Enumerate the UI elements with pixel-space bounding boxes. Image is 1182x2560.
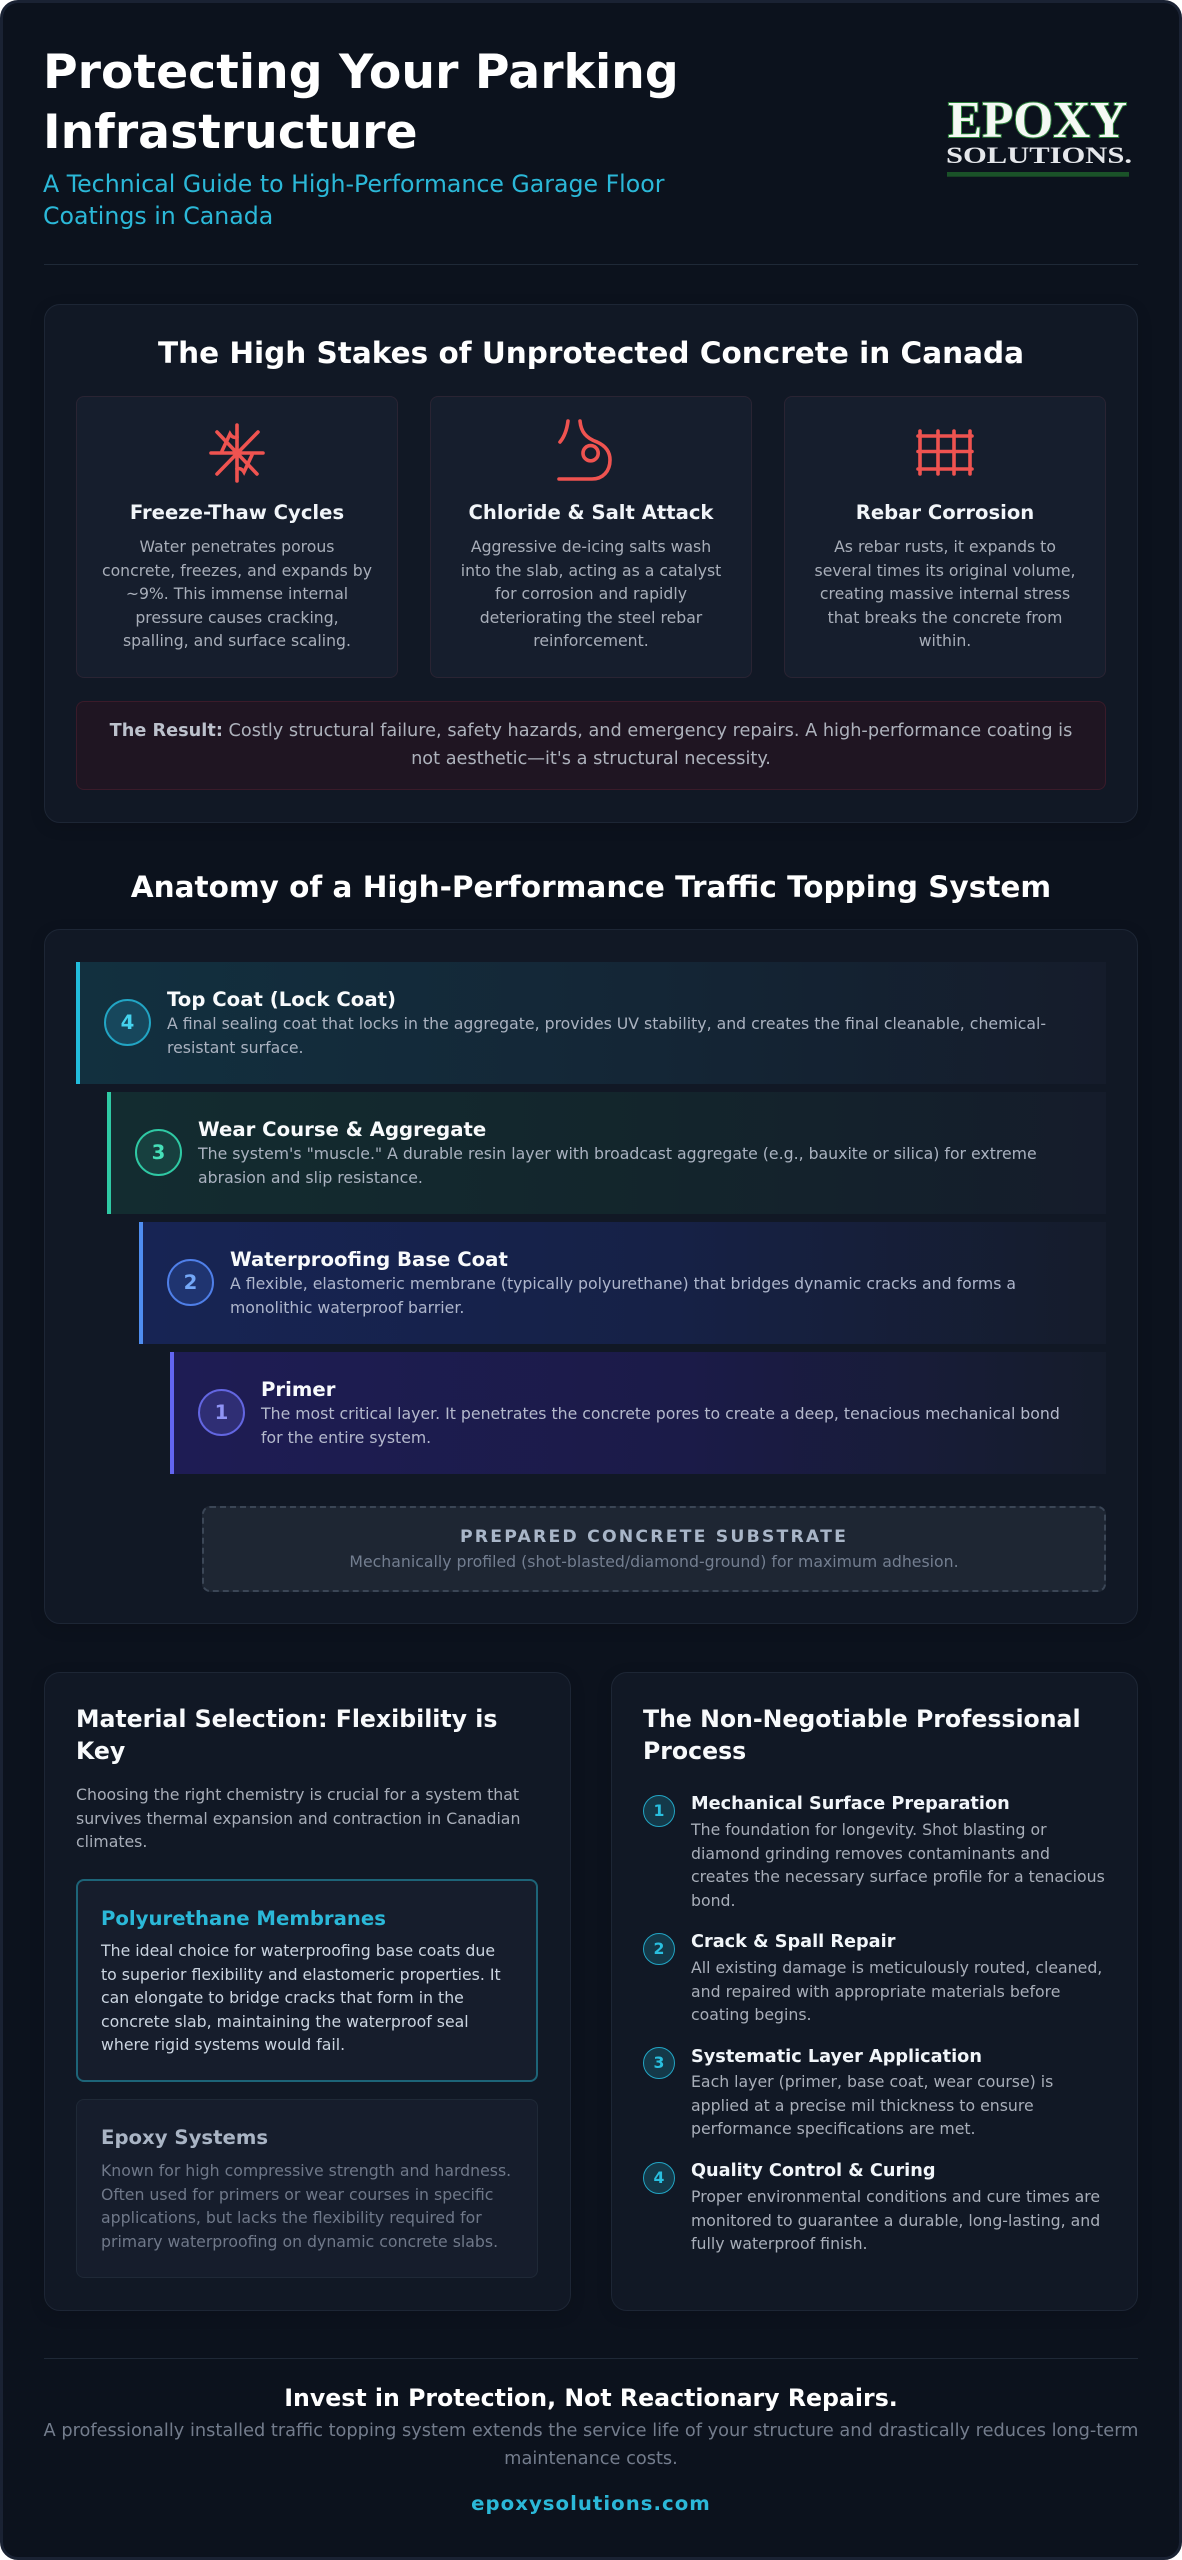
card: polyurethane membranes — [76, 1879, 538, 2082]
layer description — [198, 1144, 1037, 1187]
number badge 2: 2 — [184, 1271, 197, 1294]
step 1 text: bond. — [691, 1891, 736, 1910]
callout: the result — [76, 701, 1106, 790]
layer description — [167, 1014, 1046, 1057]
step 4 title: Quality Control & Curing — [691, 2161, 936, 2181]
footer text: maintenance costs. — [504, 2449, 678, 2469]
epoxy text: primary waterproofing on dynamic concrete slabs. — [101, 2232, 498, 2251]
layer description: The system's "muscle." A durable resin layer with broadcast aggregate (e.g., bauxite or silica) for extreme — [198, 1144, 1037, 1163]
layer 3: wear course — [107, 1092, 1106, 1214]
layer description: A final sealing coat that locks in the aggregate, provides UV stability, and creates the final cleanable, chemical- — [167, 1014, 1046, 1033]
panel: the high stakes — [44, 304, 1138, 823]
step 2 text: All existing damage is meticulously routed, cleaned, — [691, 1958, 1102, 1977]
step 3 number: 3 — [654, 2053, 664, 2072]
card body: Water penetrates porous — [140, 537, 334, 556]
epoxy text — [101, 2161, 511, 2251]
card body: concrete, freezes, and expands by — [102, 561, 372, 580]
step 3 title: Systematic Layer Application — [691, 2047, 982, 2067]
heading: professional process: The Non-Negotiable Professional — [643, 1705, 1081, 1733]
step 4 number — [643, 2162, 675, 2194]
heading: anatomy: Anatomy of a High-Performance Traffic Topping System — [131, 870, 1051, 904]
step 1 text — [690, 1820, 1105, 1910]
epoxy title: Epoxy Systems — [101, 2126, 268, 2149]
icon: rebar grid — [916, 429, 974, 476]
title — [43, 45, 679, 160]
layer 4: top coat — [76, 962, 1106, 1084]
icon: salt drop — [557, 419, 612, 481]
number badge 3 — [135, 1129, 182, 1176]
card: freeze-thaw cycles — [76, 396, 398, 678]
polyurethane text: to superior flexibility and elastomeric properties. It — [101, 1965, 501, 1984]
layer description: monolithic waterproof barrier. — [230, 1298, 464, 1317]
layer description — [230, 1274, 1016, 1317]
heading: professional process: Process — [643, 1737, 746, 1765]
layer description: The most critical layer. It penetrates the concrete pores to create a deep, tenacious mechanical bond — [261, 1404, 1060, 1423]
subtitle: A Technical Guide to High-Performance Garage Floor — [43, 170, 664, 198]
step 4 number: 4 — [654, 2168, 664, 2187]
polyurethane text: can elongate to bridge cracks that form in the — [101, 1988, 464, 2007]
polyurethane text — [100, 1941, 501, 2054]
substrate title: PREPARED CONCRETE SUBSTRATE — [460, 1527, 848, 1547]
step 3 text — [691, 2072, 1053, 2138]
epoxy text: Often used for primers or wear courses in specific — [101, 2185, 493, 2204]
layer 1: primer — [170, 1352, 1106, 1474]
heading: material selection — [76, 1705, 497, 1765]
step 2 number — [643, 1933, 675, 1965]
step 4 text — [691, 2187, 1100, 2253]
step 4 text: Proper environmental conditions and cure times are — [691, 2187, 1100, 2206]
card body — [102, 537, 372, 650]
step 1 text: The foundation for longevity. Shot blasting or — [691, 1820, 1047, 1839]
card body: Aggressive de-icing salts wash — [471, 537, 711, 556]
number badge 3: 3 — [152, 1141, 165, 1164]
icon: snowflake crack — [209, 423, 265, 483]
step 2 title: Crack & Spall Repair — [691, 1932, 895, 1952]
step 4 text: fully waterproof finish. — [691, 2234, 868, 2253]
layer description: abrasion and slip resistance. — [198, 1168, 423, 1187]
card body: for corrosion and rapidly — [495, 584, 687, 603]
step 2 text — [691, 1958, 1102, 2024]
step 3 — [643, 2047, 1053, 2138]
title: Infrastructure — [43, 105, 418, 160]
step 4 — [643, 2161, 1100, 2253]
footer heading: Invest in Protection, Not Reactionary Repairs. — [284, 2384, 898, 2412]
layer title: Primer — [261, 1378, 335, 1401]
substrate note: Mechanically profiled (shot-blasted/diamond-ground) for maximum adhesion. — [349, 1552, 959, 1571]
panel: professional process — [611, 1672, 1138, 2311]
material intro text: climates. — [76, 1832, 147, 1851]
epoxy text: applications, but lacks the flexibility required for — [101, 2208, 482, 2227]
step 1 number — [643, 1795, 675, 1827]
step 3 text: performance specifications are met. — [691, 2119, 976, 2138]
step 1 title: Mechanical Surface Preparation — [691, 1794, 1010, 1814]
layer description: A flexible, elastomeric membrane (typically polyurethane) that bridges dynamic cracks and forms a — [230, 1274, 1016, 1293]
card body: several times its original volume, — [815, 561, 1075, 580]
heading: professional process — [643, 1705, 1081, 1765]
material intro text — [76, 1785, 520, 1851]
material intro text: Choosing the right chemistry is crucial for a system that — [76, 1785, 519, 1804]
step 2 text: coating begins. — [691, 2005, 812, 2024]
footer text: A professionally installed traffic topping system extends the service life of your structure and drastically reduces long-term — [44, 2421, 1138, 2441]
card body: creating massive internal stress — [820, 584, 1070, 603]
step 1 text: creates the necessary surface profile for a tenacious — [691, 1867, 1105, 1886]
card body: spalling, and surface scaling. — [123, 631, 351, 650]
panel: anatomy layers — [44, 929, 1138, 1624]
layer title: Waterproofing Base Coat — [230, 1248, 508, 1271]
card title: Rebar Corrosion — [856, 501, 1034, 524]
callout: the result: The Result: Costly structural failure, safety hazards, and emergency repairs. A high-performance coating is — [110, 721, 1072, 741]
logo: Epoxy Solutions: SOLUTIONS. — [946, 143, 1132, 168]
heading: high stakes: The High Stakes of Unprotected Concrete in Canada — [158, 336, 1024, 370]
layer description: for the entire system. — [261, 1428, 431, 1447]
layer description: resistant surface. — [167, 1038, 304, 1057]
layer title: Top Coat (Lock Coat) — [167, 988, 396, 1011]
card body: that breaks the concrete from — [828, 608, 1062, 627]
card body: ~9%. This immense internal — [126, 584, 348, 603]
card title: Freeze-Thaw Cycles — [130, 501, 344, 524]
polyurethane text: concrete slab, maintaining the waterproof seal — [101, 2012, 469, 2031]
number badge 1 — [198, 1389, 245, 1436]
callout: the result: not aesthetic—it's a structural necessity. — [411, 748, 771, 768]
title: Protecting Your Parking — [43, 45, 679, 100]
heading: material selection: Key — [76, 1737, 125, 1765]
substrate box — [202, 1506, 1106, 1592]
layer title: Wear Course & Aggregate — [198, 1118, 486, 1141]
number badge 2 — [167, 1259, 214, 1306]
card body: deteriorating the steel rebar — [480, 608, 702, 627]
polyurethane title: Polyurethane Membranes — [101, 1907, 386, 1930]
number badge 1: 1 — [215, 1401, 228, 1424]
card: epoxy systems — [76, 2099, 538, 2278]
heading: material selection: Material Selection: Flexibility is — [76, 1705, 497, 1733]
card body — [461, 537, 721, 650]
card body: reinforcement. — [533, 631, 649, 650]
card body: As rebar rusts, it expands to — [834, 537, 1056, 556]
card body: within. — [919, 631, 971, 650]
card body: into the slab, acting as a catalyst — [461, 561, 721, 580]
card body: pressure causes cracking, — [135, 608, 339, 627]
subtitle: Coatings in Canada — [43, 202, 273, 230]
step 4 text: monitored to guarantee a durable, long-lasting, and — [691, 2211, 1100, 2230]
material intro text: survives thermal expansion and contraction in Canadian — [76, 1809, 520, 1828]
step 1 text: diamond grinding removes contaminants and — [691, 1844, 1050, 1863]
step 3 number — [643, 2047, 675, 2079]
epoxy text: Known for high compressive strength and hardness. — [101, 2161, 511, 2180]
footer text — [44, 2421, 1138, 2469]
subtitle — [43, 170, 664, 230]
step 2 — [643, 1932, 1102, 2024]
logo: Epoxy Solutions: EPOXY — [948, 92, 1127, 149]
panel: material selection — [44, 1672, 571, 2311]
layer 2: waterproofing base coat — [139, 1222, 1106, 1344]
card: chloride and salt attack — [430, 396, 752, 678]
layer description — [260, 1404, 1060, 1447]
step 2 number: 2 — [654, 1939, 664, 1958]
number badge 4: 4 — [121, 1011, 134, 1034]
step 3 text: Each layer (primer, base coat, wear course) is — [691, 2072, 1053, 2091]
card body — [815, 537, 1075, 650]
card title: Chloride & Salt Attack — [469, 501, 713, 524]
polyurethane text: where rigid systems would fail. — [101, 2035, 345, 2054]
number badge 4 — [104, 999, 151, 1046]
step 2 text: and repaired with appropriate materials before — [691, 1982, 1060, 2001]
card: rebar corrosion — [784, 396, 1106, 678]
polyurethane text: The ideal choice for waterproofing base coats due — [101, 1941, 495, 1960]
footer link: epoxysolutions.com — [471, 2492, 711, 2515]
step 3 text: applied at a precise mil thickness to ensure — [691, 2096, 1034, 2115]
step 1 number: 1 — [654, 1801, 664, 1820]
logo: Epoxy Solutions — [946, 92, 1132, 177]
step 1 — [643, 1794, 1105, 1910]
